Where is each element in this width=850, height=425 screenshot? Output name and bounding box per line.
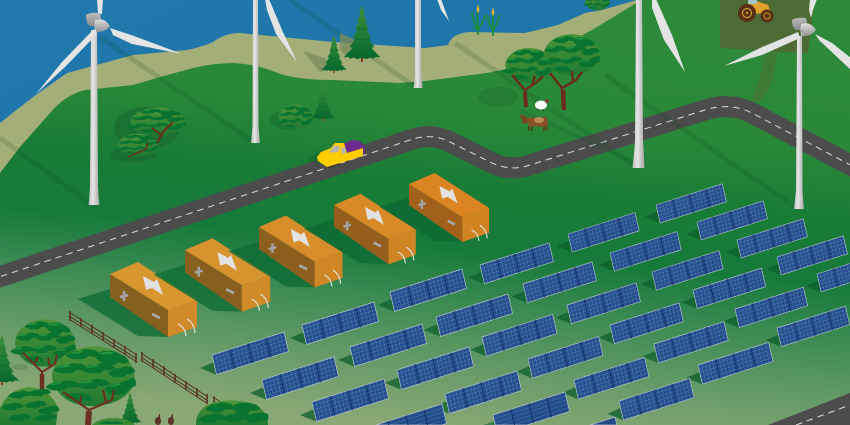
- wind turbine 5: [724, 0, 850, 209]
- tree: lower left A: [10, 319, 76, 393]
- solar panel: cut by bottom edge, left: [376, 404, 446, 425]
- background: sand shoreline: [0, 0, 660, 190]
- battery unit 3: [228, 215, 343, 287]
- solar array: [200, 184, 850, 422]
- wind turbine 2: [251, 0, 297, 143]
- tree: lower left B: [45, 347, 136, 425]
- rabbits: [155, 414, 174, 425]
- pine: medium: [321, 35, 347, 73]
- car: [308, 140, 365, 168]
- solar panel: cut by bottom edge, centre: [483, 392, 570, 425]
- tree: lower centre E: [92, 418, 135, 425]
- tree group: left bushy trees: [110, 107, 186, 162]
- wind turbine 3: [414, 0, 449, 88]
- battery unit 2: [154, 238, 270, 312]
- bush: shore: [583, 0, 610, 10]
- tractor: [738, 0, 774, 22]
- tree: lower left C: [0, 387, 59, 425]
- wind turbine 4: [632, 0, 685, 168]
- battery unit 5: [380, 173, 489, 242]
- road: lower right corner: [768, 393, 850, 425]
- tall tree: left of pair: [478, 48, 553, 107]
- tall tree: right of pair: [539, 34, 600, 110]
- road: main winding road: [0, 107, 850, 280]
- wind turbine 1: [36, 0, 182, 205]
- solar panel: cut by bottom edge, right: [590, 417, 617, 425]
- corn plants: [472, 4, 499, 36]
- battery unit 4: [304, 194, 416, 264]
- tree: lower centre D: [196, 400, 268, 425]
- bush: centre: [270, 105, 313, 130]
- cow: [520, 114, 548, 131]
- pine shadow on sand: [303, 33, 360, 72]
- pine: large: [344, 5, 380, 62]
- turbine shadows: [0, 0, 795, 207]
- battery unit 1: [78, 262, 197, 337]
- pine: lower centre: [118, 392, 142, 425]
- fence: [69, 311, 224, 411]
- pine: near road: [311, 83, 335, 121]
- pine: lower left edge: [0, 335, 19, 385]
- field patch near tractor: [720, 0, 815, 102]
- sheep: [535, 99, 549, 111]
